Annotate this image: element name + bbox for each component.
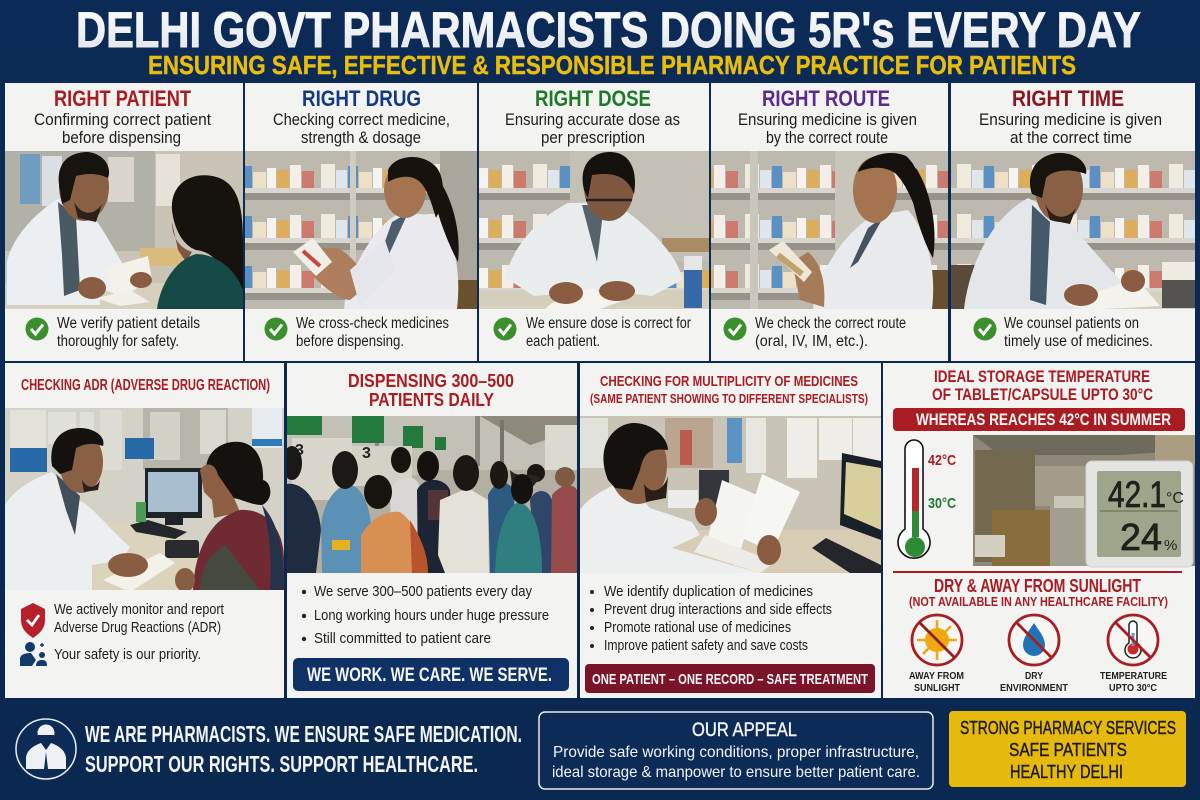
crowd bbox=[530, 491, 552, 573]
text: right dose note: We ensure dose is correct for bbox=[526, 315, 691, 332]
bullet list: dispensing bbox=[302, 583, 549, 647]
thermometer bbox=[898, 440, 956, 558]
bullet list: multiplicity: We identify duplication of medicines bbox=[604, 583, 813, 600]
heading: dispensing: PATIENTS DAILY bbox=[369, 390, 494, 410]
thermometer label: 42: 42°C bbox=[928, 452, 956, 469]
man in white coat bbox=[7, 198, 122, 305]
text: right patient note: We verify patient details bbox=[57, 315, 200, 332]
text: right patient note: thoroughly for safety. bbox=[57, 333, 179, 350]
our appeal box bbox=[539, 712, 933, 789]
our appeal box: ideal storage & manpower to ensure better patient care. bbox=[552, 764, 920, 781]
footer slogan: SUPPORT OUR RIGHTS. SUPPORT HEALTHCARE. bbox=[85, 751, 478, 777]
text: right dose note bbox=[526, 315, 691, 350]
description: right route bbox=[738, 110, 917, 147]
text: right time note bbox=[1004, 315, 1153, 350]
our appeal box: Provide safe working conditions, proper infrastructure, bbox=[553, 744, 919, 761]
subtitle: ENSURING SAFE, EFFECTIVE & RESPONSIBLE PHARMACY PRACTICE FOR PATIENTS bbox=[148, 50, 1076, 80]
bullet list: multiplicity: Promote rational use of medicines bbox=[604, 619, 791, 636]
icon labels: SUNLIGHT bbox=[914, 682, 960, 694]
heading: storage temperature: IDEAL STORAGE TEMPERATURE bbox=[934, 368, 1150, 386]
heading: right patient: RIGHT PATIENT bbox=[54, 86, 191, 111]
heading: right dose: RIGHT DOSE bbox=[535, 86, 651, 111]
man bbox=[580, 480, 760, 573]
panel: right time bbox=[951, 83, 1195, 361]
icon: no sunlight bbox=[912, 615, 962, 665]
panel: right route bbox=[711, 83, 948, 361]
description: right patient: before dispensing bbox=[62, 128, 181, 147]
thermo-hygrometer display: 42.1 bbox=[1108, 474, 1166, 515]
callout: one patient one record bbox=[585, 664, 875, 693]
yellow callout: SAFE PATIENTS bbox=[1009, 740, 1127, 760]
bullet list: dispensing: Long working hours under huge pressure bbox=[314, 607, 549, 624]
description: right dose: Ensuring accurate dose as bbox=[505, 110, 680, 129]
icon: people care bbox=[20, 642, 47, 666]
heading: multiplicity: (SAME PATIENT SHOWING TO DIFFERENT SPECIALISTS) bbox=[590, 391, 868, 406]
panel: right dose bbox=[479, 83, 709, 361]
heading: right time: RIGHT TIME bbox=[1012, 86, 1124, 111]
heading: right drug: RIGHT DRUG bbox=[302, 86, 421, 111]
panel: dispensing bbox=[282, 363, 577, 698]
icon labels: DRY bbox=[1025, 670, 1043, 682]
woman bbox=[206, 442, 270, 505]
heading: multiplicity bbox=[590, 373, 868, 406]
bullet list: multiplicity: Improve patient safety and save costs bbox=[604, 637, 808, 654]
description: right drug bbox=[273, 110, 450, 147]
our appeal box: OUR APPEAL bbox=[692, 720, 797, 741]
description: right route: Ensuring medicine is given bbox=[738, 110, 917, 129]
photo: queue of patients bbox=[282, 415, 577, 573]
bullet list: dispensing: Still committed to patient care bbox=[314, 630, 491, 647]
text: right time note: timely use of medicines. bbox=[1004, 333, 1153, 350]
icon: shield bbox=[21, 603, 45, 638]
heading: multiplicity: CHECKING FOR MULTIPLICITY OF MEDICINES bbox=[600, 373, 858, 390]
woman bbox=[344, 213, 458, 309]
icon labels: UPTO 30°C bbox=[1109, 682, 1157, 694]
callout: we work: WE WORK. WE CARE. WE SERVE. bbox=[307, 665, 552, 686]
description: right patient bbox=[34, 110, 211, 147]
text: right time note: We counsel patients on bbox=[1004, 315, 1139, 332]
description: right route: by the correct route bbox=[766, 128, 888, 147]
icon labels: AWAY FROM bbox=[909, 670, 964, 682]
photo: reviewing prescriptions bbox=[580, 416, 881, 573]
monitor bbox=[840, 453, 881, 540]
description: right time bbox=[979, 110, 1162, 147]
bullet list: multiplicity bbox=[590, 583, 832, 654]
callout: we work bbox=[293, 658, 569, 691]
description: right drug: Checking correct medicine, bbox=[273, 110, 450, 129]
papers bbox=[706, 480, 757, 566]
photo: queue of patients: 3 bbox=[295, 442, 304, 459]
heading: dispensing: DISPENSING 300–500 bbox=[348, 371, 514, 391]
icon: check bbox=[974, 318, 996, 340]
text: right route note: We check the correct route bbox=[755, 315, 906, 332]
text: right drug note: We cross-check medicines bbox=[296, 315, 449, 332]
computer bbox=[145, 468, 202, 518]
panel: right drug bbox=[245, 83, 477, 361]
photo: queue of patients: 3 bbox=[362, 445, 371, 462]
heading: checking ADR: CHECKING ADR (ADVERSE DRUG REACTION) bbox=[21, 377, 270, 394]
heading: storage temperature: OF TABLET/CAPSULE UPTO 30°C bbox=[932, 386, 1153, 404]
thermo-hygrometer display bbox=[1086, 461, 1193, 567]
icon labels bbox=[909, 670, 1167, 694]
thermo-hygrometer display: 24 bbox=[1120, 517, 1162, 559]
photo: hot storage room bbox=[973, 435, 1195, 566]
photo: pharmacist verifying patient bbox=[5, 151, 243, 309]
man bbox=[506, 202, 682, 296]
panel: storage temperature bbox=[883, 363, 1195, 698]
description: right time: Ensuring medicine is given bbox=[979, 110, 1162, 129]
heading: dispensing bbox=[348, 371, 514, 410]
text: right drug note bbox=[296, 315, 449, 350]
footer slogan: WE ARE PHARMACISTS. WE ENSURE SAFE MEDICATION. bbox=[85, 721, 522, 747]
text: right patient note bbox=[57, 315, 200, 350]
text: right route note bbox=[755, 315, 906, 350]
man bbox=[964, 198, 1122, 309]
text: ADR note bbox=[54, 601, 225, 636]
description: right dose bbox=[505, 110, 680, 147]
description: right drug: strength & dosage bbox=[301, 128, 421, 147]
text: right dose note: each patient. bbox=[526, 333, 600, 350]
icon labels: ENVIRONMENT bbox=[1000, 682, 1069, 694]
description: right patient: Confirming correct patient bbox=[34, 110, 211, 129]
banner: 42C in summer bbox=[893, 408, 1185, 431]
text: ADR note: Adverse Drug Reactions (ADR) bbox=[54, 619, 221, 636]
footer slogan bbox=[85, 721, 522, 777]
man bbox=[5, 472, 130, 590]
thermo-hygrometer display: °C bbox=[1166, 490, 1184, 507]
photo: pharmacist counselling on time bbox=[951, 151, 1195, 310]
icon: no moisture bbox=[1009, 615, 1059, 665]
text: safety priority: Your safety is our priority. bbox=[54, 646, 201, 663]
photo: pharmacist writing dose bbox=[479, 151, 709, 309]
callout: one patient one record: ONE PATIENT – ONE RECORD – SAFE TREATMENT bbox=[592, 671, 868, 688]
photo: ADR consultation bbox=[5, 408, 284, 592]
photo: pharmacist checking route bbox=[711, 151, 948, 309]
woman bbox=[813, 210, 933, 309]
heading: dry and away from sunlight bbox=[909, 576, 1168, 609]
icon: pharmacist badge bbox=[16, 719, 76, 779]
text: ADR note: We actively monitor and report bbox=[54, 601, 225, 618]
thermometer label: 30: 30°C bbox=[928, 495, 956, 512]
yellow callout: HEALTHY DELHI bbox=[1010, 762, 1123, 782]
heading: storage temperature bbox=[932, 368, 1153, 404]
icon: check bbox=[264, 318, 288, 340]
woman from back bbox=[172, 175, 243, 300]
thermo-hygrometer display: % bbox=[1164, 537, 1177, 554]
bullet list: multiplicity: Prevent drug interactions and side effects bbox=[604, 601, 832, 618]
icon: no high temperature bbox=[1108, 615, 1158, 665]
heading: right route: RIGHT ROUTE bbox=[762, 86, 890, 111]
icon: check bbox=[724, 318, 746, 340]
text: right drug note: before dispensing. bbox=[296, 333, 404, 350]
bullet list: dispensing: We serve 300–500 patients every day bbox=[314, 583, 532, 600]
panel: right patient bbox=[5, 83, 243, 361]
yellow callout bbox=[949, 711, 1186, 787]
description: right dose: per prescription bbox=[541, 128, 645, 147]
panel: checking ADR bbox=[5, 363, 284, 698]
icon: check bbox=[26, 318, 48, 340]
photo: pharmacist checking medicine bbox=[245, 151, 477, 309]
icon: check bbox=[494, 318, 516, 340]
icon labels: TEMPERATURE bbox=[1100, 670, 1167, 682]
panel: multiplicity bbox=[580, 363, 881, 698]
heading: dry and away from sunlight: DRY & AWAY FROM SUNLIGHT bbox=[934, 576, 1141, 596]
text: right route note: (oral, IV, IM, etc.). bbox=[755, 333, 868, 350]
description: right time: at the correct time bbox=[1010, 128, 1132, 147]
